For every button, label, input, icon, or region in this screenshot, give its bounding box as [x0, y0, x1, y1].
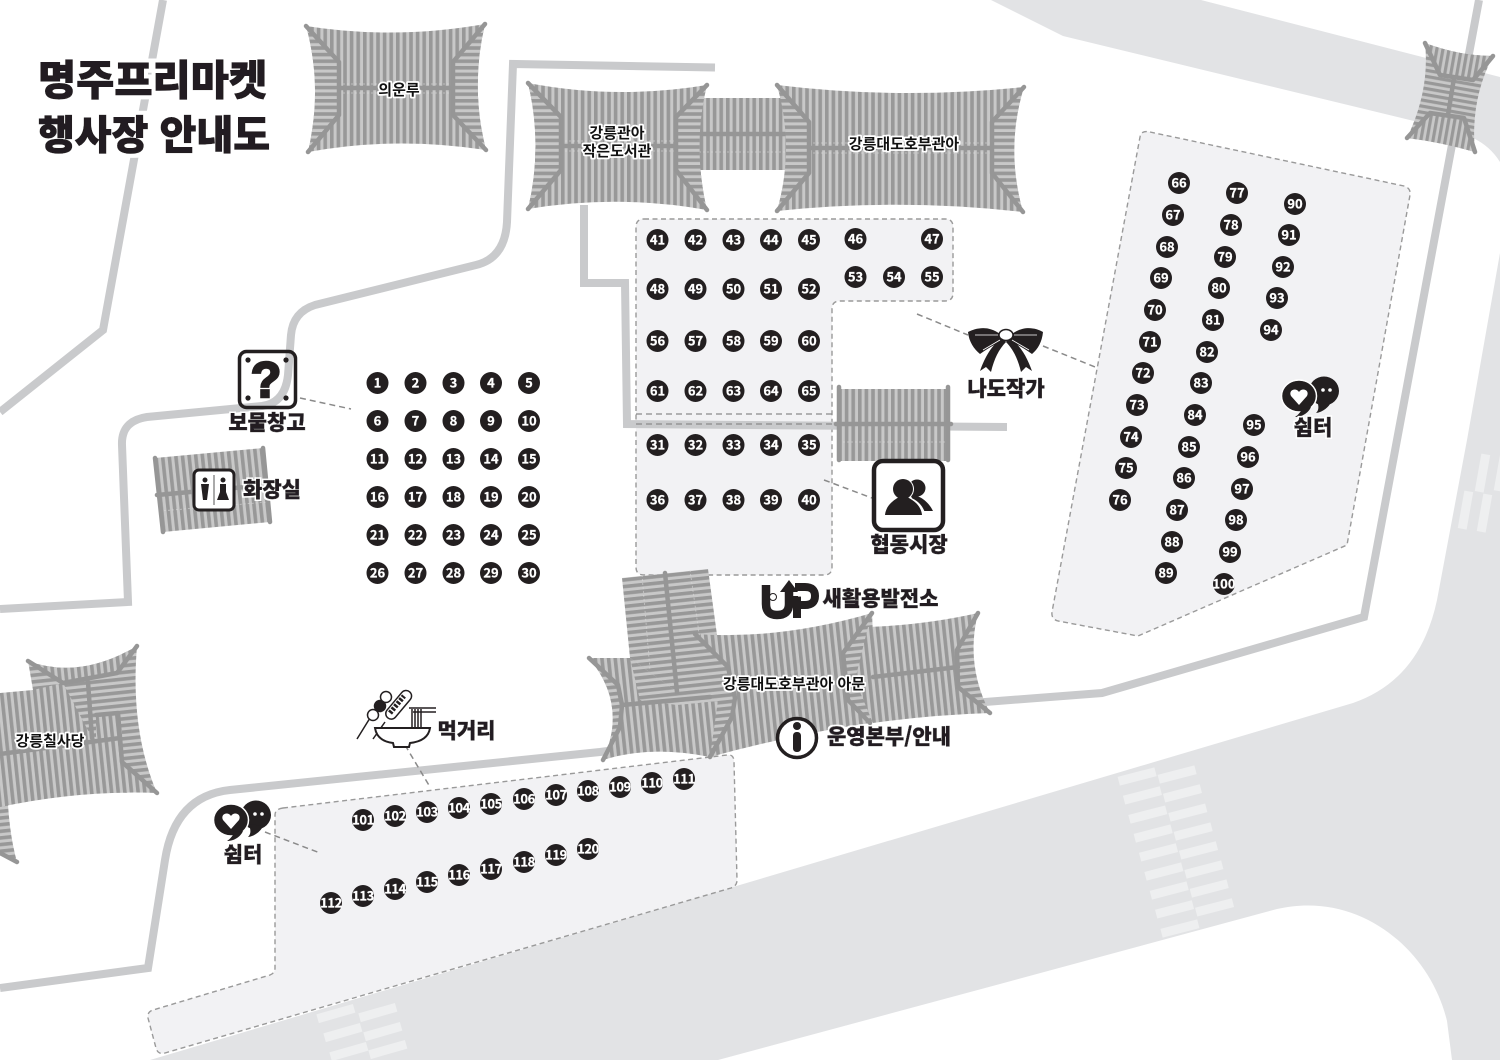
label: 새활용발전소: 새활용발전소 — [823, 583, 938, 613]
stall markers 31-65: 40 — [801, 490, 817, 508]
stall markers 1-30: 26 — [370, 562, 385, 582]
stall markers 31-65: 56 — [650, 330, 665, 350]
stall markers 31-65: 34 — [763, 434, 779, 454]
stall markers 66-100: 100 — [1212, 574, 1236, 592]
stall markers 101-120: 115 — [416, 872, 438, 890]
stall markers 1-30: 29 — [483, 562, 499, 582]
stall markers 1-30: 28 — [446, 562, 461, 582]
stall markers 66-100: 67 — [1165, 204, 1181, 224]
label: 나도작가: 나도작가 — [967, 373, 1045, 403]
stall markers 31-65: 37 — [688, 490, 703, 508]
stall markers 101-120: 111 — [673, 768, 695, 788]
stall markers 66-100: 94 — [1263, 320, 1279, 338]
label: 강릉관아 작은도서관: 강릉관아 — [589, 122, 645, 143]
stall markers 31-65: 36 — [650, 490, 665, 508]
stall zone: centre — [636, 219, 953, 575]
stall markers 66-100: 73 — [1129, 394, 1145, 414]
stall markers 31-65: 47 — [924, 228, 940, 248]
stall markers 1-30: 23 — [446, 524, 461, 544]
stall markers 101-120: 107 — [545, 784, 568, 804]
stall markers 31-65: 53 — [848, 266, 863, 286]
stall zone: bottom — [148, 755, 737, 1053]
building: connector roof — [695, 98, 800, 170]
stall markers 66-100: 68 — [1159, 236, 1175, 256]
label: 먹거리: 먹거리 — [438, 715, 495, 745]
stall markers 31-65: 32 — [688, 434, 703, 454]
stall markers 1-30: 10 — [521, 410, 537, 430]
stall markers 31-65: 38 — [726, 490, 741, 508]
icon: ribbon — [968, 328, 1043, 372]
stall markers 101-120: 112 — [320, 892, 342, 912]
stall markers 1-30: 6 — [374, 410, 382, 430]
leader lines — [265, 314, 1095, 853]
stall markers 101-120: 110 — [641, 772, 664, 792]
stall markers 1-30: 13 — [446, 448, 461, 468]
building: centre gate roof — [836, 387, 951, 461]
title: 행사장 안내도 — [38, 103, 270, 161]
label: 강릉대도호부관아 아문: 강릉대도호부관아 아문 — [723, 673, 865, 694]
label: 의운루: 의운루 — [378, 79, 420, 100]
stall markers 31-65: 60 — [801, 330, 817, 350]
stall markers 66-100: 97 — [1234, 478, 1250, 498]
label: 강릉칠사당: 강릉칠사당 — [15, 730, 85, 751]
stall markers 31-65: 43 — [726, 230, 741, 248]
stall markers 31-65: 64 — [763, 380, 779, 400]
stall markers 1-30: 11 — [370, 448, 385, 468]
icon: question block — [240, 352, 296, 408]
stall markers 101-120 — [320, 768, 695, 914]
stall markers 101-120: 108 — [577, 780, 600, 800]
stall markers 66-100: 92 — [1275, 256, 1291, 276]
stall markers 66-100: 90 — [1287, 194, 1303, 212]
label: 강릉관아 작은도서관: 작은도서관 — [582, 140, 652, 161]
stall markers 1-30: 12 — [408, 448, 423, 468]
stall markers 66-100: 83 — [1193, 372, 1209, 392]
stall markers 66-100: 71 — [1142, 332, 1158, 350]
label: 강릉대도호부관아: 강릉대도호부관아 — [849, 133, 959, 154]
stall markers 101-120: 116 — [448, 864, 471, 884]
label: 쉼터 (lower): 쉼터 — [224, 839, 262, 869]
icon: street food — [357, 688, 436, 747]
stall markers 66-100: 84 — [1187, 404, 1203, 424]
stall markers 1-30: 17 — [408, 486, 423, 506]
stall markers 66-100: 86 — [1176, 468, 1192, 486]
stall markers 1-30: 22 — [408, 524, 423, 544]
stall markers 66-100 — [1109, 172, 1306, 595]
stall markers 66-100: 81 — [1205, 310, 1221, 328]
stall markers 1-30: 3 — [450, 372, 457, 392]
stall markers 1-30: 4 — [487, 372, 495, 392]
stall markers 31-65: 44 — [763, 230, 779, 248]
stall markers 1-30: 2 — [412, 372, 419, 392]
stall markers 66-100: 78 — [1223, 214, 1239, 234]
stall markers 1-30: 27 — [408, 562, 423, 582]
stall markers 66-100: 80 — [1211, 278, 1227, 296]
stall markers 66-100: 74 — [1123, 426, 1139, 446]
stall markers 31-65: 33 — [726, 434, 741, 454]
stall markers 31-65: 45 — [801, 230, 817, 248]
icon: rest area speech bubbles (lower) — [214, 800, 271, 841]
stall markers 1-30: 9 — [487, 410, 495, 430]
stall markers 101-120: 105 — [480, 794, 502, 812]
stall markers 31-65: 55 — [924, 266, 940, 286]
building: 강릉대도호부관아 — [777, 85, 1024, 212]
stall markers 1-30: 7 — [412, 410, 420, 430]
stall markers 66-100: 93 — [1269, 288, 1285, 306]
stall markers 66-100: 89 — [1158, 562, 1174, 582]
stall markers 31-65: 39 — [763, 490, 779, 508]
stall markers 31-65: 65 — [801, 380, 817, 400]
icon: rest area speech bubbles — [1282, 376, 1339, 417]
stall markers 66-100: 88 — [1164, 532, 1180, 550]
stall markers 66-100: 69 — [1153, 268, 1169, 286]
building: 화장실 roof — [155, 448, 270, 532]
stall markers 101-120: 114 — [384, 878, 407, 898]
stall markers 66-100: 87 — [1169, 500, 1185, 518]
stall markers 31-65: 62 — [688, 380, 703, 400]
stall markers 1-30: 18 — [446, 486, 461, 506]
stall markers 101-120: 109 — [609, 776, 631, 796]
stall markers 31-65: 35 — [801, 434, 817, 454]
building: 강릉대도호부관아 아문 — [589, 569, 990, 760]
stall markers 66-100: 79 — [1217, 246, 1233, 266]
label: 협동시장: 협동시장 — [870, 529, 948, 559]
stall markers 31-65: 46 — [848, 228, 863, 248]
stall markers 31-65 — [646, 228, 943, 511]
stall markers 66-100: 91 — [1281, 224, 1297, 244]
stall markers 1-30: 25 — [521, 524, 537, 544]
stall markers 31-65: 52 — [801, 278, 817, 298]
building: 강릉칠사당 — [0, 646, 157, 862]
building: 의운루 — [306, 24, 486, 152]
stall markers 31-65: 50 — [726, 278, 741, 298]
icon: question block: ? — [251, 352, 281, 408]
stall markers 1-30: 20 — [521, 486, 537, 506]
stall markers 66-100: 95 — [1246, 414, 1262, 434]
stall markers 1-30: 1 — [374, 372, 381, 392]
stall markers 101-120: 117 — [480, 858, 503, 878]
icon: restroom — [194, 470, 234, 510]
stall markers 66-100: 72 — [1135, 362, 1151, 382]
stall markers 1-30: 5 — [525, 372, 533, 392]
stall zone: right — [1052, 132, 1410, 636]
stall markers 31-65: 42 — [688, 230, 703, 248]
stall markers 66-100: 96 — [1240, 446, 1256, 466]
stall markers 66-100: 70 — [1147, 300, 1163, 318]
stall markers 66-100: 99 — [1222, 542, 1238, 560]
zone dividers — [636, 414, 838, 424]
stall markers 1-30: 21 — [370, 524, 385, 544]
stall markers 31-65: 31 — [650, 434, 665, 454]
stall markers 66-100: 76 — [1112, 490, 1128, 508]
stall markers 101-120: 118 — [513, 852, 536, 870]
stall markers 1-30: 24 — [483, 524, 499, 544]
stall markers 1-30: 19 — [483, 486, 499, 506]
stall markers 1-30: 15 — [521, 448, 537, 468]
stall markers 101-120: 120 — [577, 838, 600, 858]
stall markers 101-120: 103 — [416, 802, 438, 820]
stall markers 66-100: 85 — [1181, 436, 1197, 456]
stall markers 31-65: 59 — [763, 330, 779, 350]
icon: people — [874, 461, 943, 530]
stall markers 66-100: 98 — [1228, 510, 1244, 528]
icon: information — [778, 718, 816, 758]
stall markers 31-65: 51 — [763, 278, 779, 298]
stall markers 101-120: 101 — [352, 810, 374, 828]
stall markers 31-65: 41 — [650, 230, 665, 248]
building: top-right gate — [1407, 43, 1493, 152]
stall markers 31-65: 48 — [650, 278, 665, 298]
stall markers 66-100: 75 — [1118, 458, 1134, 476]
stall markers 31-65: 58 — [726, 330, 741, 350]
crosswalks — [316, 453, 1500, 1060]
label: 쉼터 (right): 쉼터 — [1294, 412, 1332, 442]
stall markers 101-120: 106 — [513, 788, 536, 808]
stall markers 101-120: 113 — [352, 886, 374, 904]
label: 운영본부/안내: 운영본부/안내 — [827, 721, 951, 751]
stall markers 31-65: 49 — [688, 278, 703, 298]
title: 명주프리마켓 — [38, 47, 267, 107]
stall markers 31-65: 57 — [688, 330, 703, 350]
icon: upcycling logo — [766, 580, 815, 618]
stall markers 66-100: 66 — [1171, 172, 1187, 192]
label: 화장실: 화장실 — [243, 474, 301, 504]
stall markers 1-30 — [366, 372, 540, 584]
label: 보물창고: 보물창고 — [228, 407, 306, 437]
stall markers 1-30: 14 — [483, 448, 499, 468]
inner walkway — [584, 205, 1007, 427]
stall markers 1-30: 8 — [450, 410, 458, 430]
stall markers 101-120: 119 — [545, 844, 567, 864]
stall markers 31-65: 63 — [726, 380, 741, 400]
stall markers 1-30: 30 — [521, 562, 537, 582]
stall markers 1-30: 16 — [370, 486, 385, 506]
stall markers 66-100: 82 — [1199, 342, 1215, 360]
stall markers 101-120: 102 — [384, 806, 406, 824]
building: 강릉관아 작은도서관 — [528, 83, 707, 210]
stall markers 31-65: 61 — [650, 380, 665, 400]
stall markers 31-65: 54 — [886, 266, 902, 286]
stall markers 66-100: 77 — [1229, 182, 1245, 202]
stall markers 101-120: 104 — [448, 798, 471, 816]
